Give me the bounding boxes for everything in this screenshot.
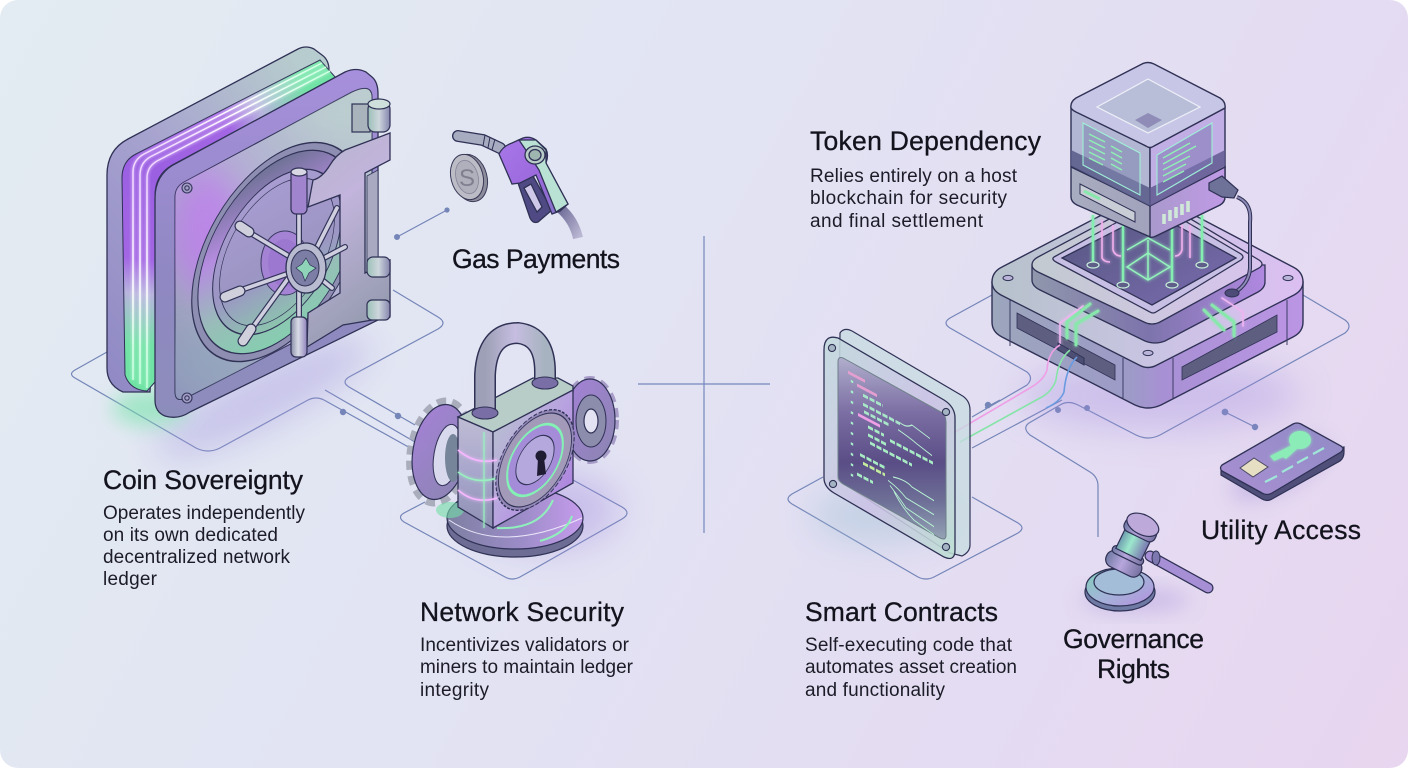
heading: smart contracts: Smart Contracts — [805, 597, 998, 627]
vault wheel centre — [286, 243, 326, 293]
contract platform outline — [788, 477, 1022, 579]
text: network security — [420, 597, 634, 701]
body: token dependency: and final settlement — [810, 211, 984, 232]
contract back pane — [838, 329, 970, 556]
text: gas payments: Gas Payments — [452, 244, 620, 274]
left gear — [403, 397, 477, 507]
contract screen — [838, 358, 946, 539]
card shadow — [1222, 427, 1338, 513]
lock neon bands — [458, 432, 497, 528]
heading: network security: Network Security — [420, 597, 625, 627]
vault floor shadows — [112, 319, 382, 477]
body: token dependency: blockchain for security — [810, 188, 1008, 209]
text: smart contracts — [805, 597, 1017, 701]
body: coin sovereignty: ledger — [103, 569, 158, 590]
vault front plate — [155, 70, 378, 417]
text: governance rights: Governance — [1063, 624, 1204, 654]
heading: coin sovereignty: Coin Sovereignty — [103, 465, 304, 495]
vault glowing layers — [122, 60, 336, 391]
text: coin sovereignty — [103, 465, 306, 590]
body: coin sovereignty: Operates independently — [103, 503, 306, 524]
icon: fuel nozzle and coin — [446, 135, 578, 238]
gavel shadow — [1080, 588, 1190, 612]
vault wheel hub — [261, 231, 309, 295]
text: token dependency — [810, 126, 1042, 232]
heading: token dependency: Token Dependency — [810, 126, 1042, 156]
lock platform outline — [400, 480, 627, 579]
keyhole — [536, 450, 546, 476]
text: governance rights — [1063, 624, 1204, 684]
hose — [560, 208, 578, 238]
spout — [458, 135, 500, 150]
body: network security: Incentivizes validators or — [420, 635, 630, 656]
body: smart contracts: and functionality — [805, 680, 946, 701]
gavel head — [1103, 507, 1164, 580]
contract coloured cables — [950, 345, 1077, 442]
server block metal base — [1071, 167, 1225, 237]
connector lines: right side — [946, 295, 1349, 537]
server middle tier — [1032, 198, 1265, 343]
contract code lines — [848, 372, 934, 535]
card chip — [1240, 458, 1268, 477]
contract panel shadow — [810, 487, 950, 543]
card dashes — [1265, 448, 1324, 482]
lock base disc — [436, 487, 583, 557]
vault cutout panel — [367, 170, 378, 272]
server usb cable — [1209, 176, 1250, 297]
body: smart contracts: Self-executing code that — [805, 635, 1013, 656]
body: token dependency: Relies entirely on a host — [810, 166, 1018, 187]
server base side — [992, 282, 1303, 408]
server floor shadow — [1020, 360, 1300, 430]
vault handle frame — [307, 133, 390, 347]
server glass cube — [1071, 62, 1225, 206]
text: governance rights: Rights — [1097, 654, 1170, 684]
contract front pane — [824, 337, 955, 558]
vault screws — [182, 183, 192, 403]
server pillar sockets — [1087, 262, 1208, 288]
server base vents — [1017, 313, 1277, 380]
central divider cross — [638, 236, 770, 533]
server cable socket — [1058, 343, 1084, 365]
server base panel seams — [1010, 298, 1287, 398]
body: coin sovereignty: on its own dedicated — [103, 525, 278, 546]
lock floor shadow — [470, 470, 620, 550]
body: coin sovereignty — [103, 503, 306, 590]
vault door disc — [192, 105, 362, 399]
text: utility access: Utility Access — [1201, 515, 1361, 545]
body: network security: integrity — [420, 680, 490, 701]
server base bolts — [1003, 275, 1293, 356]
body: smart contracts — [805, 635, 1017, 701]
icon: access card with key — [1220, 423, 1344, 513]
server base top — [992, 192, 1303, 368]
icon: gavel — [1080, 507, 1208, 612]
vault door spokes — [227, 205, 345, 338]
server cube screens — [1083, 123, 1212, 195]
server light pillars and cube — [1093, 215, 1202, 283]
gavel handle — [1150, 551, 1208, 588]
lock body — [458, 378, 573, 528]
body: coin sovereignty: decentralized network — [103, 547, 290, 568]
server circuit traces — [1060, 298, 1243, 345]
body: smart contracts: automates asset creation — [805, 657, 1017, 678]
gavel sound block — [1085, 568, 1155, 611]
vault handle grips — [225, 168, 307, 357]
body: network security: miners to maintain ledger — [420, 657, 634, 678]
lock dial — [496, 392, 574, 528]
connector lines: left side — [72, 208, 449, 451]
card key — [1270, 431, 1311, 461]
card body — [1221, 447, 1344, 500]
vault front face — [174, 88, 372, 400]
body: token dependency — [810, 166, 1018, 232]
nozzle body — [499, 137, 568, 222]
body: network security — [420, 635, 634, 701]
vault hinges — [352, 99, 390, 320]
icon: padlock with gears — [400, 333, 627, 579]
icon: smart contract panel — [788, 329, 1077, 579]
icon: bank vault — [107, 47, 390, 477]
vault back plate — [107, 47, 329, 392]
right gear — [565, 379, 615, 461]
shackle — [472, 333, 558, 419]
contract screws — [828, 344, 950, 551]
icon: host blockchain server — [992, 62, 1303, 430]
coin: S — [459, 165, 475, 192]
